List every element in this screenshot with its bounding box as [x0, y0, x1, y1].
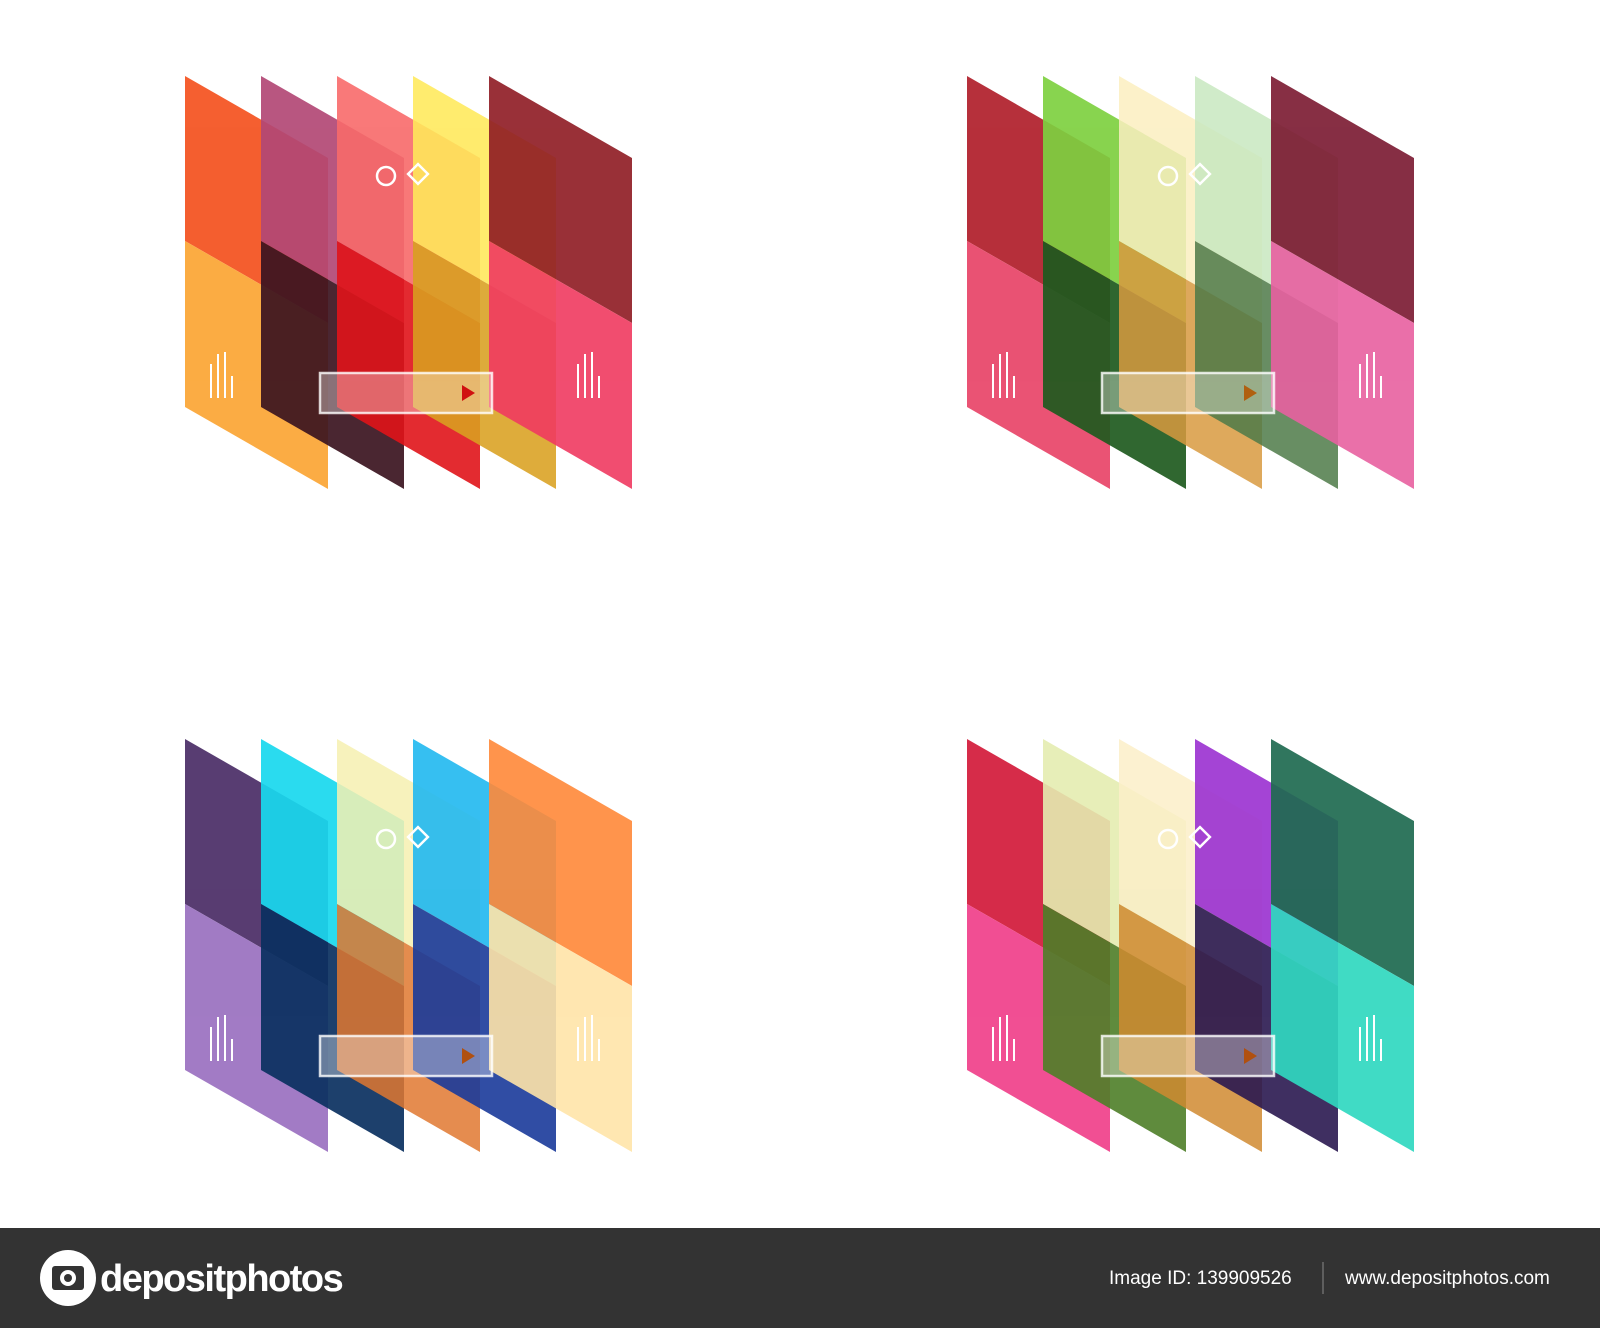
icons: circle, diamond, button, bars [993, 827, 1381, 1076]
footer bar [0, 1228, 1600, 1328]
panel: top-right green strips [967, 76, 1414, 489]
panel: top-left warm strips [185, 76, 632, 489]
icons: circle, diamond, button, bars [993, 164, 1381, 413]
icons: circle, diamond, button, bars [211, 164, 599, 413]
website: www.depositphotos.com [1344, 1268, 1550, 1289]
panel: bottom-left blue strips [185, 739, 632, 1152]
icons: circle, diamond, button, bars [211, 827, 599, 1076]
panel: bottom-right purple strips [967, 739, 1414, 1152]
image id: Image ID: 139909526 [1109, 1268, 1292, 1289]
icon: camera logo [40, 1250, 96, 1306]
logo text: depositphotos [100, 1258, 343, 1300]
